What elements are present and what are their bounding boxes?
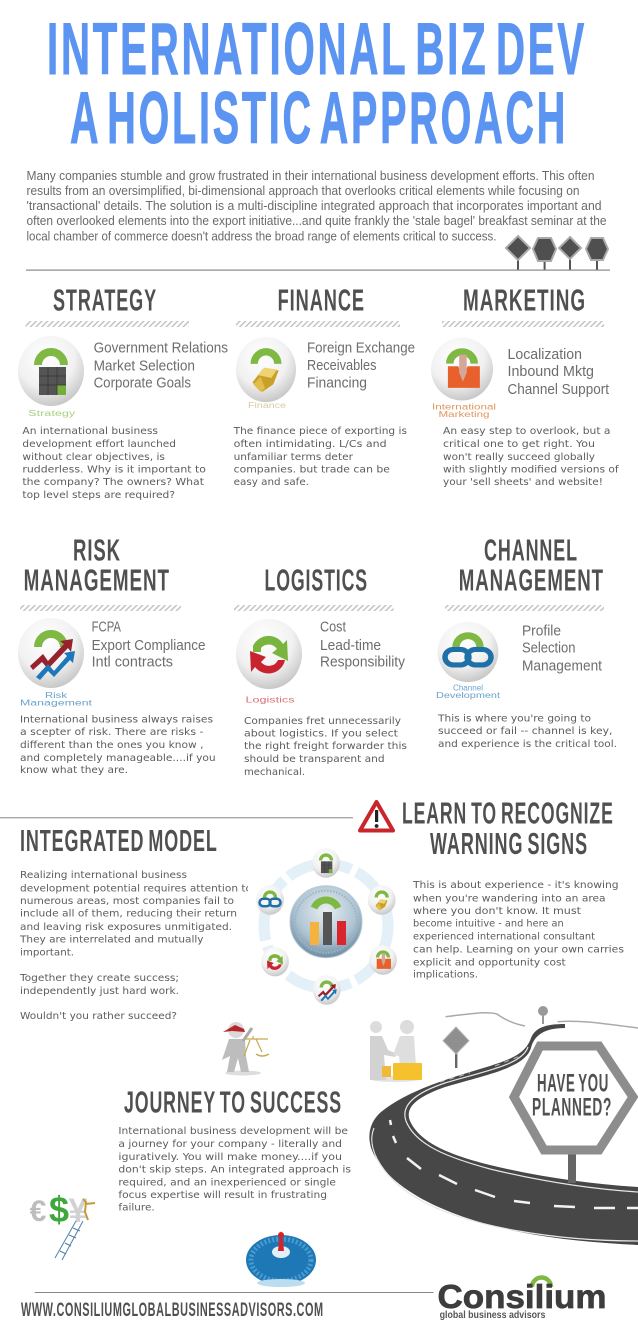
panel: strategy: top level steps are required? (22, 490, 175, 501)
panel: risk management: different than the ones you know , (20, 740, 204, 751)
panel: risk management: FCPA (92, 619, 121, 636)
panel: strategy: STRATEGY (53, 283, 157, 318)
icon: money and ladder: $ (49, 1189, 69, 1230)
panel: finance: easy and safe. (234, 477, 309, 488)
icon: marketing (431, 338, 493, 400)
icon: money and ladder (30, 1189, 95, 1260)
icon: warning triangle (360, 802, 393, 830)
journey text: don't skip steps. An integrated approach is (118, 1165, 351, 1176)
icon: crowd circle (246, 1231, 316, 1287)
panel: integrated model: important. (20, 948, 74, 959)
journey text: failure. (118, 1203, 155, 1214)
journey text: a journey for your company - literally and (118, 1139, 342, 1150)
panel: risk management: Management (20, 698, 93, 708)
panel: strategy: Strategy (28, 409, 75, 418)
panel: channel management: Profile (522, 623, 561, 640)
warning signs text: implications. (413, 970, 478, 981)
panel: strategy: the company? The owners? What (22, 477, 204, 488)
panel: logistics: the right freight forwarder this (244, 741, 407, 752)
warning heading (360, 795, 614, 861)
panel: strategy: without clear objectives, is (22, 452, 165, 463)
panel: risk management: Intl contracts (92, 654, 173, 671)
panel: logistics: Cost (320, 619, 347, 636)
panel: channel management (436, 533, 617, 750)
panel: strategy: Market Selection (94, 358, 195, 375)
panel: integrated model: and leaving risk exposures unmitigated. (20, 922, 232, 933)
panel: logistics: Companies fret unnecessarily (244, 716, 401, 727)
panel: channel management: Development (436, 691, 501, 700)
panel: integrated model: include all of them, reducing their return (20, 909, 237, 920)
panel: marketing (431, 283, 619, 488)
panel: channel management: succeed or fail -- channel is key, (438, 726, 612, 737)
panel: finance: companies. but trade can be (234, 465, 390, 476)
panel: logistics (234, 563, 407, 778)
warning signs text: This is about experience - it's knowing (412, 880, 619, 891)
panel: integrated model: They are interrelated and mutually (19, 935, 204, 946)
panel: risk management: a scepter of risk. There are risks - (20, 727, 204, 738)
panel: strategy (18, 283, 228, 501)
intro text: Many companies stumble and grow frustrated in their international business development efforts. This often (26, 169, 595, 183)
title (47, 9, 587, 159)
panel: risk management: know what they are. (20, 765, 128, 776)
panel: strategy: An international business (22, 426, 158, 437)
diagram: integrated model wheel (256, 848, 397, 1005)
panel: marketing: An easy step to overlook, but a (443, 426, 610, 437)
icon: money and ladder: € (30, 1195, 47, 1228)
panel: finance: Foreign Exchange (307, 340, 415, 357)
panel: logistics: LOGISTICS (264, 563, 368, 598)
panel: risk management: and completely manageable....if you (20, 753, 216, 764)
panel: strategy: rudderless. Why is it important to (22, 465, 206, 476)
panel: risk management: Export Compliance (92, 637, 206, 654)
panel: risk management: RISK (73, 533, 121, 568)
footer url: WWW.CONSILIUMGLOBALBUSINESSADVISORS.COM (21, 1300, 324, 1321)
warning signs text: can help. Learning on your own carries (413, 945, 624, 956)
icon: road sign have you planned (514, 1046, 633, 1183)
warning signs text: explicit and opportunity cost (413, 958, 566, 969)
panel: finance: Financing (307, 375, 367, 392)
warning signs text: experienced international consultant (413, 932, 595, 943)
journey text: focus expertise will result in frustrating (118, 1190, 327, 1201)
panel: integrated model (19, 823, 252, 1022)
panel: integrated model: independently just hard work. (20, 986, 179, 997)
warning signs text (412, 880, 624, 981)
panel: channel management: Management (522, 658, 603, 675)
panel: marketing: with slightly modified versions of (443, 465, 619, 476)
panel: logistics: Responsibility (320, 654, 405, 671)
panel: strategy: Corporate Goals (94, 375, 191, 392)
panel: marketing: won't really succeed globally (443, 452, 595, 463)
journey text: required, and an inexperienced or single (118, 1178, 336, 1189)
panel: integrated model: Wouldn't you rather succeed? (20, 1011, 177, 1022)
panel: finance: unfamiliar terms deter (234, 452, 354, 463)
icon: channel (438, 622, 498, 682)
panel: logistics: mechanical. (244, 767, 305, 778)
panel: marketing: Channel Support (508, 381, 610, 398)
panel: finance: often intimidating. L/Cs and (234, 439, 387, 450)
panel: marketing: Marketing (438, 410, 490, 419)
panel: marketing: International (432, 402, 496, 412)
panel: channel management: This is where you're going to (437, 714, 591, 725)
icon: finance (236, 337, 296, 402)
icon: strategy (18, 336, 84, 406)
panel: finance: The finance piece of exporting is (233, 426, 407, 437)
icon: money and ladder: ¥ (69, 1192, 88, 1230)
illustration: road (369, 1006, 638, 1245)
panel: finance: FINANCE (278, 283, 365, 318)
icon: road signs row (506, 236, 608, 270)
panel: strategy: development effort launched (22, 439, 176, 450)
panel: channel management: Selection (522, 640, 576, 657)
panel: finance: Receivables (307, 357, 376, 374)
panel: logistics: should be transparent and (244, 754, 385, 765)
panel: marketing: Localization (508, 346, 582, 363)
panel: logistics: Lead-time (320, 637, 381, 654)
panel: channel management: and experience is the critical tool. (438, 739, 617, 750)
panel: integrated model: Realizing international business (20, 870, 187, 881)
panel: integrated model: INTEGRATED MODEL (20, 823, 218, 858)
panel: integrated model: development potential requires attention to (20, 884, 252, 895)
journey text (118, 1126, 351, 1214)
icon: diamond road sign (443, 1027, 469, 1068)
intro text: local chamber of commerce doesn't address the broad range of elements critical to success. (26, 230, 496, 244)
intro text: often overlooked elements into the export initiative...and quite frankly the 'stale bagel' breakfast seminar at the (26, 214, 607, 228)
journey text: International business development will be (118, 1126, 348, 1137)
icon: handshake with briefcase (370, 1020, 422, 1082)
panel: finance: Finance (248, 401, 287, 410)
panel: marketing: your 'sell sheets' and website! (443, 477, 603, 488)
panel: logistics: Logistics (246, 696, 294, 704)
panel: integrated model: Together they create success; (19, 973, 179, 984)
panel: risk management: International business always raises (20, 715, 213, 726)
logo: consilium: Consilium (438, 1278, 606, 1315)
journey text: iguratively. You will make money....if you (118, 1152, 342, 1163)
intro text (26, 169, 607, 244)
panel: risk management (18, 533, 216, 776)
intro text: 'transactional' details. The solution is a multi-discipline integrated approach that incorporates important and (26, 199, 602, 213)
journey heading: JOURNEY TO SUCCESS (124, 1085, 342, 1120)
warning signs text: become intuitive - and here an (413, 919, 564, 930)
warning signs text: when you're wandering into an area (413, 894, 606, 905)
icon: justice figure (222, 1022, 269, 1076)
panel: finance (233, 283, 415, 488)
panel: marketing: critical one to get right. You (443, 439, 595, 450)
icon: risk (18, 618, 84, 688)
warning signs text: where you don't know. It must (413, 906, 581, 917)
panel: integrated model: numerous areas, most companies fail to (20, 896, 234, 907)
panel: channel management: Channel (453, 684, 483, 692)
panel: logistics: about logistics. If you select (244, 729, 398, 740)
icon: logistics (236, 619, 302, 689)
panel: risk management: MANAGEMENT (24, 563, 170, 598)
logo: consilium: global business advisors (440, 1310, 546, 1321)
panel: marketing: Inbound Mktg (508, 363, 594, 380)
intro text: results from an oversimplified, bi-dimensional approach that overlooks critical elements while focusing on (26, 184, 580, 198)
panel: risk management: Risk (45, 691, 68, 700)
panel: strategy: Government Relations (94, 340, 228, 357)
